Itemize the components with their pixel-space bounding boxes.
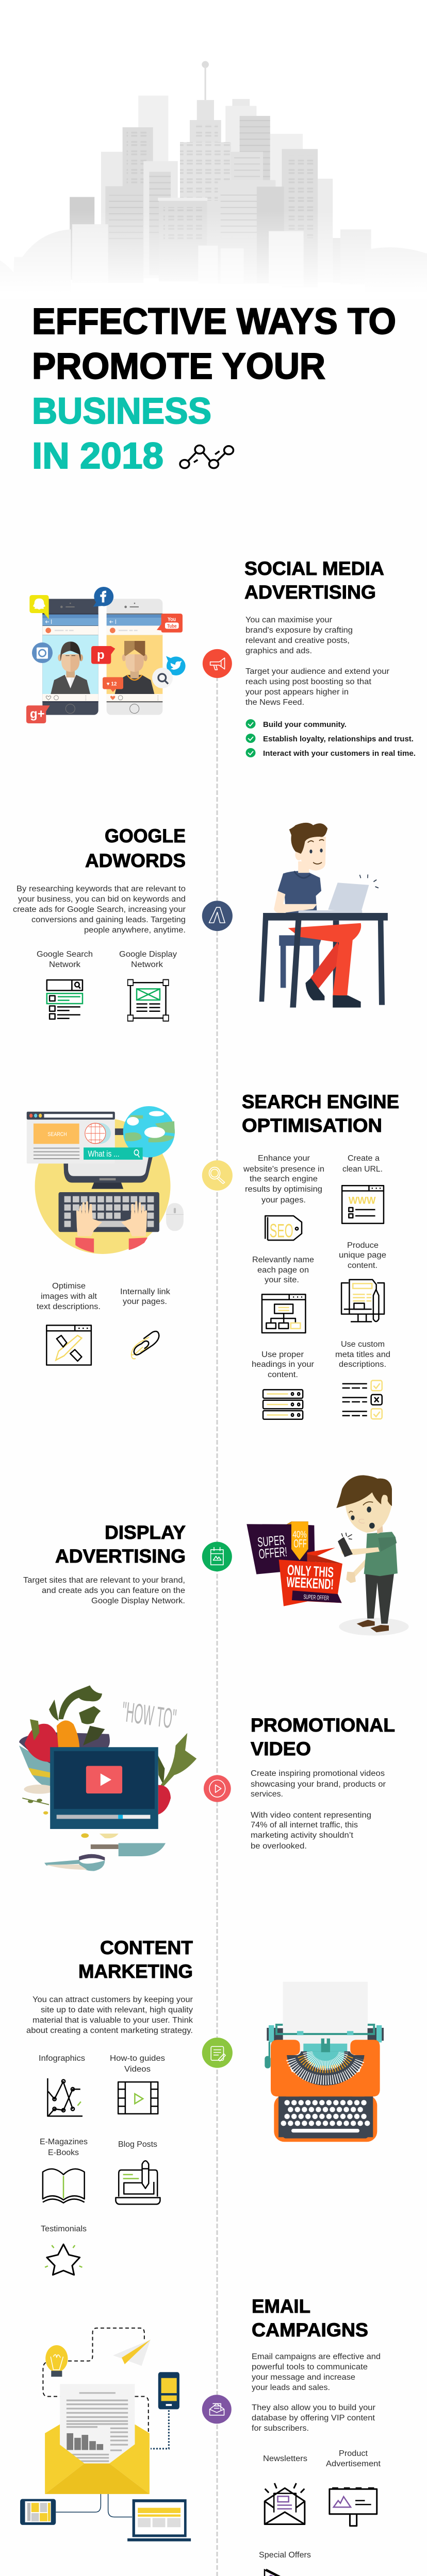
text: alt descriptions bbox=[37, 1282, 101, 1311]
heading: display advertising bbox=[55, 1522, 186, 1567]
text: adwords body: create ads for Google Search, increasing your bbox=[13, 905, 186, 914]
checklist: social media benefits: Establish loyalty, relationships and trust. bbox=[263, 735, 414, 743]
illustration: phones with social badges: Tube bbox=[167, 623, 177, 629]
illustration: keyboard, browser and globe: What is ... bbox=[88, 1149, 120, 1159]
heading: search engine optimisation: OPTIMISATION bbox=[242, 1115, 382, 1136]
right person bbox=[115, 675, 154, 694]
heading: display advertising: DISPLAY bbox=[105, 1522, 186, 1543]
text: promotional video body: With video content representing bbox=[251, 1811, 371, 1820]
illustration: offer banners: SUPER bbox=[257, 1532, 286, 1550]
illustration: offer banners: WEEKEND! bbox=[286, 1574, 334, 1592]
search bbox=[152, 668, 173, 688]
illustration: keyboard, browser and globe: SEARCH bbox=[47, 1131, 67, 1138]
label: newsletters: Newsletters bbox=[263, 2454, 307, 2463]
text: social media body: graphics and ads. bbox=[245, 647, 312, 655]
label: product advertisement: Advertisement bbox=[326, 2460, 381, 2468]
label: testimonials: Testimonials bbox=[41, 2225, 87, 2233]
text: proper headings bbox=[252, 1350, 314, 1379]
text: content marketing body: site up to date with relevant, high quality bbox=[41, 2006, 193, 2014]
heading: search engine optimisation bbox=[242, 1091, 399, 1136]
label: e-magazines e-books: E-Magazines bbox=[40, 2138, 88, 2146]
label: e-magazines e-books bbox=[40, 2138, 88, 2157]
label: e-magazines e-books: E-Books bbox=[48, 2148, 79, 2157]
text: internal links: your pages. bbox=[123, 1297, 167, 1306]
icon: search network bbox=[47, 980, 83, 1019]
heading: social media advertising bbox=[244, 558, 384, 603]
text: promotional video body bbox=[251, 1769, 386, 1851]
text: clean url: Create a bbox=[348, 1154, 380, 1163]
text: display body: and create ads you can feature on the bbox=[42, 1586, 185, 1595]
heading: email campaigns bbox=[252, 2296, 368, 2341]
illustration: how-to cooking video bbox=[19, 1685, 196, 1871]
icon: sitemap bbox=[262, 1294, 305, 1333]
heading: content marketing: MARKETING bbox=[78, 1961, 193, 1982]
icon: billboard bbox=[330, 2488, 377, 2526]
text: social media body: reach using post boosting so that bbox=[245, 677, 372, 686]
text: custom meta bbox=[335, 1340, 390, 1369]
title: EFFECTIVE WAYS TO bbox=[32, 301, 396, 342]
heading: social media advertising: ADVERTISING bbox=[244, 582, 376, 603]
label: google display network: Network bbox=[131, 960, 163, 969]
icons row bbox=[46, 696, 51, 700]
illustration: offer banners: ONLY THIS bbox=[287, 1562, 334, 1580]
text: social media body: brand's exposure by crafting bbox=[245, 626, 353, 635]
text: proper headings: headings in your bbox=[252, 1360, 314, 1369]
text: promotional video body: be overlooked. bbox=[251, 1842, 307, 1851]
icon: sale sign bbox=[265, 2569, 305, 2576]
icon: infographic chart bbox=[47, 2078, 83, 2116]
youtube bbox=[157, 614, 183, 633]
text: alt descriptions: images with alt bbox=[41, 1292, 97, 1301]
text: custom meta: Use custom bbox=[341, 1340, 385, 1349]
text: seo intro: Enhance your bbox=[258, 1154, 310, 1163]
icon: film strip bbox=[118, 2082, 158, 2114]
text: unique content: Produce bbox=[347, 1241, 379, 1250]
hero: city skyline illustration bbox=[0, 0, 427, 299]
text: email body: your message and increase bbox=[252, 2373, 355, 2382]
icon: star bbox=[45, 2244, 82, 2275]
text: seo intro: the search engine bbox=[250, 1175, 318, 1183]
illustration: phones with social badges: You bbox=[168, 616, 176, 622]
checklist: social media benefits: Interact with your customers in real time. bbox=[263, 750, 416, 758]
label: google search network bbox=[37, 950, 93, 969]
icon: display network bbox=[128, 979, 169, 1021]
heading: social media advertising: SOCIAL MEDIA bbox=[244, 558, 384, 579]
icon: edit image bbox=[46, 1325, 91, 1365]
heading: google adwords: GOOGLE bbox=[105, 825, 186, 846]
icon: checklist bbox=[342, 1381, 382, 1419]
text: display body: Google Display Network. bbox=[91, 1597, 185, 1605]
icon: adwords marker bbox=[202, 901, 233, 931]
icon: megaphone marker bbox=[203, 649, 232, 678]
text: email body bbox=[252, 2352, 381, 2433]
label: google display network bbox=[119, 950, 177, 969]
text: proper headings: Use proper bbox=[261, 1350, 304, 1359]
text: relevantly name bbox=[252, 1256, 314, 1284]
text: social media body: your post appears higher in bbox=[245, 688, 349, 697]
text: content marketing body: You can attract customers by keeping your bbox=[32, 1995, 193, 2004]
heading: content marketing: CONTENT bbox=[100, 1937, 193, 1958]
checklist: social media benefits bbox=[245, 719, 416, 758]
text: content marketing body bbox=[26, 1995, 193, 2035]
label: product advertisement: Product bbox=[339, 2449, 368, 2458]
text: clean url bbox=[342, 1154, 383, 1174]
title bbox=[32, 301, 396, 477]
icon: line graph bbox=[180, 445, 233, 468]
section: google adwords bbox=[13, 823, 388, 1021]
text: email body: They also allow you to build your bbox=[252, 2403, 375, 2412]
text: display body: Target sites that are relevant to your brand, bbox=[23, 1576, 185, 1585]
text: promotional video body: marketing activity shouldn’t bbox=[251, 1831, 354, 1840]
text: social media body: relevant and creative posts, bbox=[245, 636, 350, 645]
twitter bbox=[167, 656, 186, 675]
icon: calendar marker bbox=[202, 1542, 232, 1571]
label: infographics: Infographics bbox=[39, 2054, 85, 2063]
icon: open book bbox=[43, 2169, 85, 2203]
heading: email campaigns: EMAIL bbox=[252, 2296, 310, 2317]
facebook bbox=[93, 587, 113, 607]
text: email body: Email campaigns are effective and bbox=[252, 2352, 381, 2361]
label: how-to guides videos: Videos bbox=[124, 2065, 151, 2074]
section: social media advertising bbox=[26, 558, 416, 758]
text: content marketing body: about creating a content marketing strategy. bbox=[26, 2026, 193, 2035]
heading: content marketing bbox=[78, 1937, 193, 1982]
text: adwords body: people anywhere, anytime. bbox=[84, 926, 186, 935]
text: relevantly name: your site. bbox=[265, 1276, 299, 1284]
illustration: phones with social badges bbox=[26, 587, 186, 723]
snapchat bbox=[29, 595, 49, 619]
label: google display network: Google Display bbox=[119, 950, 177, 959]
illustration: man with laptop at desk bbox=[259, 823, 388, 1008]
text: clean url: clean URL. bbox=[342, 1165, 383, 1174]
like badge bbox=[103, 677, 123, 692]
timeline dashed line bbox=[217, 656, 218, 2576]
left person bbox=[51, 675, 90, 694]
text: email body: powerful tools to communicate bbox=[252, 2363, 368, 2371]
text: custom meta: meta titles and bbox=[335, 1350, 390, 1359]
text: email body: your leads and sales. bbox=[252, 2383, 330, 2392]
checklist: social media benefits: Build your community. bbox=[263, 721, 347, 729]
section: promotional video bbox=[19, 1685, 395, 1871]
illustration: man looking at phone bbox=[336, 1475, 409, 1636]
icon: document marker bbox=[202, 2038, 233, 2068]
illustration: envelope and devices bbox=[20, 2328, 191, 2541]
icon: magnifier marker bbox=[202, 1160, 233, 1191]
heading: email campaigns: CAMPAIGNS bbox=[252, 2319, 368, 2341]
text: seo intro: results by optimising bbox=[245, 1185, 322, 1194]
label: special offers: Special Offers bbox=[259, 2551, 311, 2560]
text: adwords body: your business, you can bid on keywords and bbox=[18, 895, 186, 904]
text: seo intro bbox=[243, 1154, 324, 1205]
text: internal links: Internally link bbox=[120, 1287, 170, 1296]
icon: server rows bbox=[263, 1389, 303, 1419]
illustration: how-to cooking video: "HOW TO" bbox=[121, 1695, 178, 1735]
text: promotional video body: 74% of all internet traffic, this bbox=[251, 1821, 358, 1829]
label: how-to guides videos bbox=[110, 2054, 165, 2074]
icon: envelope marker bbox=[202, 2395, 232, 2424]
heading: search engine optimisation: SEARCH ENGINE bbox=[242, 1091, 399, 1112]
pinterest bbox=[91, 646, 115, 664]
heading: google adwords bbox=[85, 825, 186, 871]
icon: newsletter envelope bbox=[265, 2483, 305, 2524]
heading: display advertising: ADVERTISING bbox=[55, 1546, 186, 1567]
heading: promotional video: VIDEO bbox=[251, 1738, 311, 1759]
section: content marketing bbox=[26, 1937, 384, 2275]
text: promotional video body: showcasing your brand, products or bbox=[251, 1780, 386, 1789]
text: relevantly name: Relevantly name bbox=[252, 1256, 314, 1264]
illustration: phones with social badges: p bbox=[97, 648, 105, 662]
icon: play marker bbox=[204, 1775, 231, 1802]
illustration: offer banners: OFFER! bbox=[258, 1544, 288, 1562]
icon: www browser: WWW bbox=[349, 1195, 376, 1206]
illustration: offer banners: SUPER OFFER bbox=[303, 1593, 329, 1602]
illustration: typewriter bbox=[265, 1982, 384, 2142]
text: display body bbox=[23, 1576, 185, 1605]
text: promotional video body: services. bbox=[251, 1790, 283, 1799]
text: unique content bbox=[339, 1241, 386, 1270]
text: social media body: Target your audience and extend your bbox=[245, 667, 389, 676]
heading: promotional video: PROMOTIONAL bbox=[251, 1715, 395, 1736]
label: google search network: Google Search bbox=[37, 950, 93, 959]
text: content marketing body: material that is valuable to your user. Think bbox=[32, 2016, 193, 2025]
text: seo intro: website's presence in bbox=[243, 1165, 324, 1174]
text: relevantly name: each page on bbox=[257, 1266, 309, 1275]
google plus bbox=[26, 705, 50, 723]
illustration: offer banners bbox=[247, 1521, 342, 1606]
icon: seo tag: SEO bbox=[270, 1221, 293, 1242]
section: display advertising bbox=[23, 1475, 409, 1636]
text: email body: for subscribers. bbox=[252, 2424, 309, 2433]
text: social media body: You can maximise your bbox=[245, 616, 332, 624]
text: seo intro: your pages. bbox=[261, 1196, 306, 1205]
text: social media body bbox=[245, 616, 389, 707]
section: search engine optimisation bbox=[27, 1091, 399, 1419]
icon: chain link bbox=[131, 1331, 159, 1359]
text: promotional video body: Create inspiring promotional videos bbox=[251, 1769, 385, 1778]
instagram bbox=[32, 642, 53, 663]
text: proper headings: content. bbox=[268, 1370, 298, 1379]
text: adwords body: By researching keywords that are relevant to bbox=[17, 885, 186, 893]
text: internal links bbox=[120, 1287, 170, 1306]
text: unique content: content. bbox=[348, 1261, 377, 1270]
text: email body: database by offering VIP content bbox=[252, 2414, 375, 2422]
title: IN 2018 bbox=[32, 436, 163, 477]
text: alt descriptions: text descriptions. bbox=[37, 1302, 101, 1311]
title: BUSINESS bbox=[32, 391, 211, 432]
icon: blog laptop bbox=[116, 2161, 160, 2204]
illustration: keyboard, browser and globe bbox=[27, 1106, 184, 1254]
icon: www browser bbox=[342, 1185, 384, 1224]
label: product advertisement bbox=[326, 2449, 381, 2468]
illustration: offer banners: OFF bbox=[293, 1537, 307, 1550]
title: PROMOTE YOUR bbox=[32, 346, 325, 387]
section: email campaigns bbox=[20, 2296, 381, 2576]
illustration: offer banners: 40% bbox=[292, 1529, 307, 1540]
icon: unique content page bbox=[341, 1280, 384, 1321]
label: how-to guides videos: How-to guides bbox=[110, 2054, 165, 2063]
heading: promotional video bbox=[251, 1715, 395, 1759]
label: google search network: Network bbox=[49, 960, 80, 969]
text: alt descriptions: Optimise bbox=[52, 1282, 86, 1291]
text: adwords body: conversions and gaining leads. Targeting bbox=[31, 916, 186, 924]
text: adwords body bbox=[13, 885, 186, 935]
heading: google adwords: ADWORDS bbox=[85, 850, 186, 871]
text: social media body: the News Feed. bbox=[245, 698, 304, 707]
illustration: phones with social badges: ♥ 12 bbox=[107, 681, 117, 687]
text: custom meta: descriptions. bbox=[339, 1360, 386, 1369]
label: blog posts: Blog Posts bbox=[118, 2140, 157, 2149]
text: unique content: unique page bbox=[339, 1251, 386, 1260]
illustration: phones with social badges: g+ bbox=[30, 707, 45, 721]
